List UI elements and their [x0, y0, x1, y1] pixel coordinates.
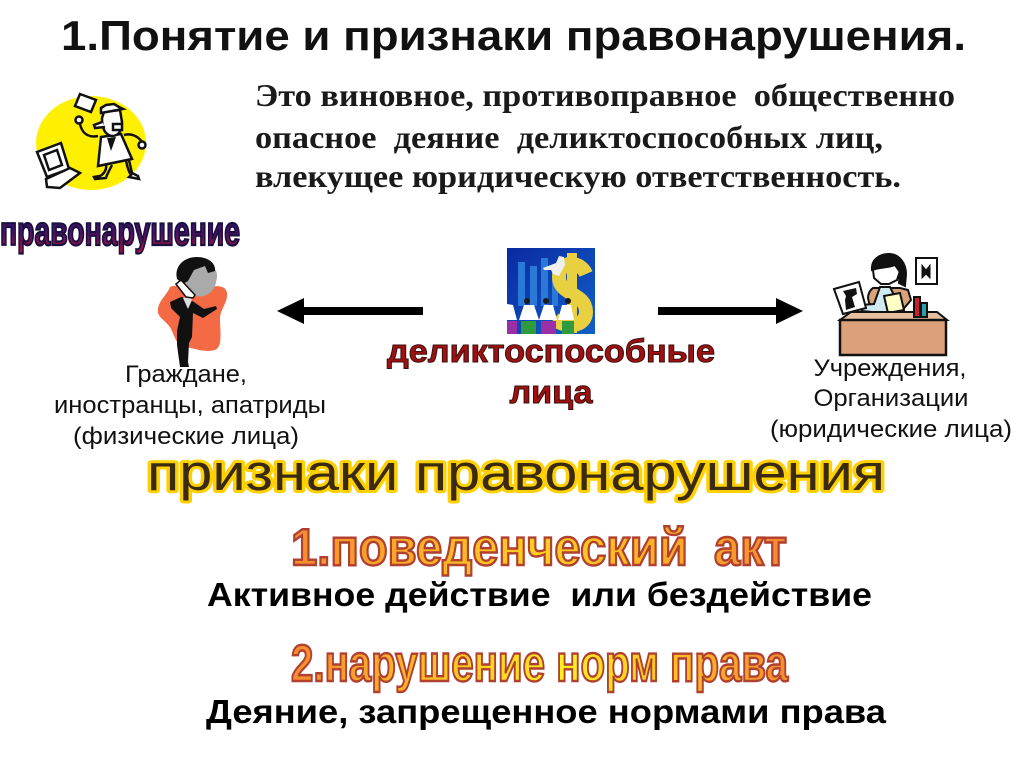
- text: юридические лица: [770, 355, 1012, 443]
- text: деяние запрещенное: Деяние, запрещенное нормами права: [206, 693, 887, 730]
- icon: clerk at desk: [834, 254, 947, 355]
- arrow: left: [277, 298, 423, 324]
- definition text block: Это виновное, противоправное общественно: [255, 78, 955, 113]
- heading: признаки правонарушения: признаки правонарушения: [147, 444, 885, 501]
- text: юридические лица: Учреждения,: [814, 355, 966, 382]
- label: деликтоспособные лица: [387, 333, 715, 410]
- text: физические лица: иностранцы, апатриды: [54, 392, 326, 419]
- icon: offender on yellow circle: [36, 94, 146, 190]
- icon: people and dollar sign: [507, 248, 595, 334]
- definition text block: опасное деяние деликтоспособных лиц,: [255, 120, 883, 155]
- text: активное действие: Активное действие или бездействие: [207, 576, 872, 613]
- heading: нарушение норм права: 2.нарушение норм права: [291, 635, 789, 693]
- icon: citizen on phone: [158, 257, 227, 367]
- label: деликтоспособные лица: деликтоспособные: [387, 333, 715, 369]
- text: юридические лица: (юридические лица): [770, 416, 1012, 443]
- arrow: right: [658, 298, 803, 324]
- text: физические лица: [54, 361, 326, 450]
- text: физические лица: (физические лица): [73, 423, 299, 450]
- definition text block: влекущее юридическую ответственность.: [255, 159, 901, 194]
- text: юридические лица: Организации: [814, 385, 968, 412]
- label: деликтоспособные лица: лица: [510, 374, 593, 410]
- heading: поведенческий акт: 1.поведенческий акт: [291, 519, 787, 577]
- label: правонарушение: правонарушение: [0, 208, 240, 254]
- definition text block: [255, 78, 955, 194]
- title: 1.Понятие и признаки правонарушения.: [61, 12, 966, 59]
- text: физические лица: Граждане,: [125, 361, 247, 388]
